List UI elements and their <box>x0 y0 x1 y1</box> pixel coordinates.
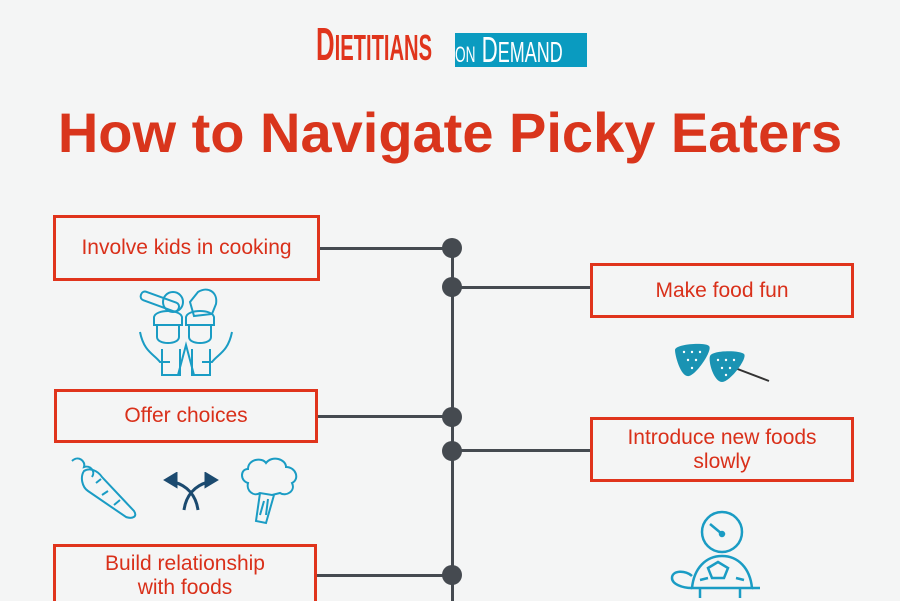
connectors <box>319 247 453 250</box>
timeline vertical line <box>451 246 454 601</box>
icon: turtle with speedometer <box>670 510 760 598</box>
box: Make food fun <box>590 263 854 318</box>
box: Involve kids in cooking: Involve kids in cooking <box>81 236 292 259</box>
box: Offer choices <box>54 389 318 443</box>
icon: kids chefs <box>139 288 233 376</box>
icon: broccoli <box>241 458 298 524</box>
box: Make food fun: Make food fun <box>655 278 789 302</box>
box: Offer choices: Offer choices <box>124 404 248 427</box>
box: Build relationship with foods: Build relationship <box>105 552 265 575</box>
box: Introduce new foods slowly: Introduce new foods <box>627 426 817 448</box>
logo <box>316 18 587 70</box>
box: Build relationship with foods <box>53 544 317 601</box>
icon: carrot <box>71 458 136 519</box>
box: Introduce new foods slowly <box>590 417 854 482</box>
box: Build relationship with foods: with foods <box>138 576 232 599</box>
icon: choice arrows <box>163 472 219 510</box>
title: How to Navigate Picky Eaters <box>58 101 842 164</box>
logo text: Dietitians: DIETITIANS <box>316 18 432 70</box>
box: Involve kids in cooking <box>53 215 320 281</box>
icon: fruit skewer <box>675 344 770 382</box>
box: Introduce new foods slowly: slowly <box>693 450 751 472</box>
